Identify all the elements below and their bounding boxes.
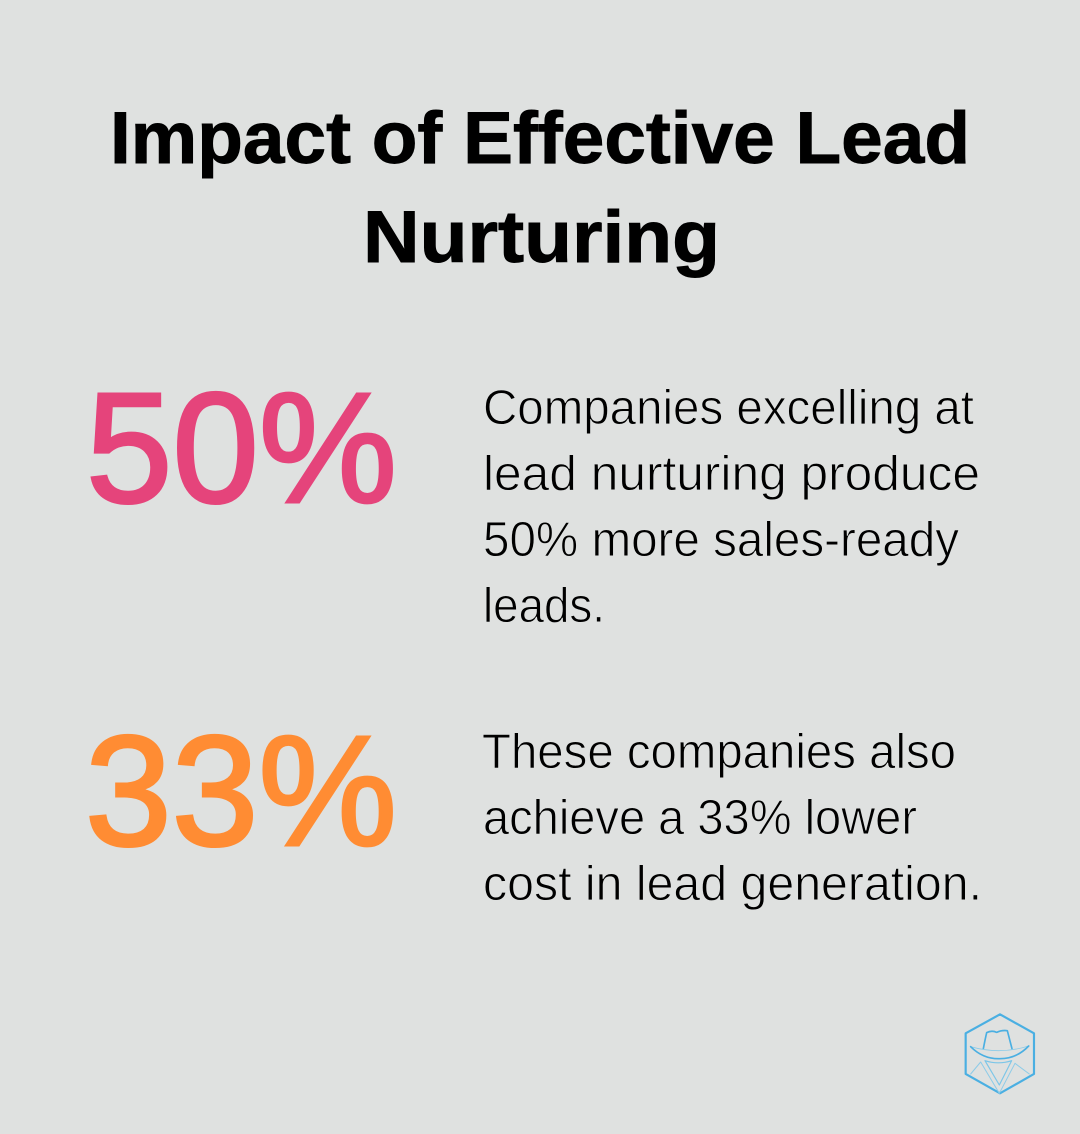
title: Nurturing xyxy=(363,197,720,278)
icon: hexagon logo with hat and spy figure xyxy=(966,1014,1034,1093)
panel: 50% statistic xyxy=(86,361,980,633)
text block: sales-ready leads: Companies excelling at xyxy=(483,381,974,435)
title xyxy=(110,98,970,278)
text block: sales-ready leads: leads. xyxy=(483,579,605,633)
big number: 50%: 50% xyxy=(86,361,397,536)
text block: lower cost: These companies also xyxy=(482,725,956,779)
text block: lower cost: achieve a 33% lower xyxy=(483,791,917,845)
text block: lower cost xyxy=(482,725,982,911)
big number: 33%: 33% xyxy=(85,704,397,879)
text block: sales-ready leads: lead nurturing produce xyxy=(483,447,980,501)
text block: sales-ready leads xyxy=(483,381,980,633)
text block: lower cost: cost in lead generation. xyxy=(483,857,982,911)
title: Impact of Effective Lead xyxy=(110,98,970,179)
text block: sales-ready leads: 50% more sales-ready xyxy=(483,513,959,567)
panel: 33% statistic xyxy=(85,704,982,911)
